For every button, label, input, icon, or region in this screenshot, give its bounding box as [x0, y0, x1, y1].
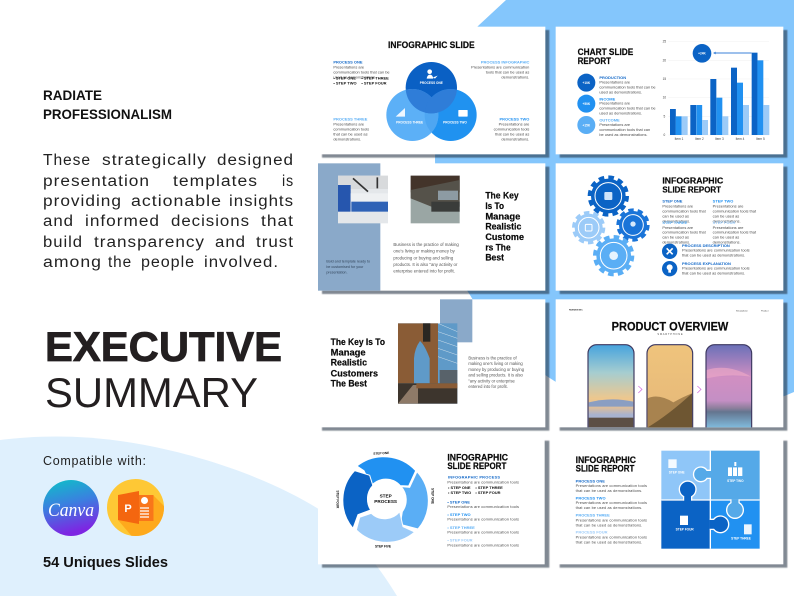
bar chart: Item 3: [715, 137, 724, 141]
text: process infographic: tools that can be used as: [486, 69, 529, 74]
text: step one: Presentations are: [662, 203, 693, 208]
header: Product: [761, 310, 769, 313]
text: process three: PROCESS THREE: [576, 513, 610, 518]
text: process two: that can be used as: [495, 131, 529, 136]
panel: key customers slide: [318, 299, 549, 431]
text: step four: demonstrations.: [713, 239, 741, 244]
text: process three: [576, 513, 647, 527]
venn diagram: [386, 62, 477, 141]
body paragraph: designed: [217, 152, 294, 169]
bar chart: 5: [663, 114, 665, 118]
metric: outcome: +15K: [583, 123, 591, 127]
heading: radiate professionalism: RADIATE: [43, 87, 102, 103]
puzzle: [661, 451, 760, 549]
text: side note: [326, 260, 370, 274]
text: process one: PROCESS ONE: [333, 60, 363, 65]
metric: outcome: [577, 116, 650, 137]
body paragraph: and: [215, 234, 246, 251]
text: side note: be customised for your: [326, 265, 364, 269]
venn diagram: PROCESS TWO: [443, 120, 467, 124]
puzzle: STEP THREE: [731, 536, 751, 540]
blue square: [440, 299, 472, 342]
cycle diagram: STEP FOUR: [336, 490, 340, 509]
text: business paragraph: and selling products. It is also: [468, 373, 524, 378]
metric: production: PRODUCTION: [599, 75, 626, 80]
heading: [331, 337, 385, 389]
puzzle: STEP ONE: [669, 470, 685, 474]
body paragraph: actionable: [131, 193, 222, 210]
heading: radiate professionalism: [43, 87, 172, 122]
heading: Is To: [485, 201, 504, 211]
bar chart: 20: [663, 58, 666, 62]
text: process two: PROCESS TWO: [499, 117, 529, 122]
heading: The Best: [331, 379, 367, 389]
text: business paragraph: [468, 355, 525, 389]
body paragraph: [43, 152, 294, 271]
cycle diagram: [336, 451, 434, 548]
text: side note: Bold and template ready to: [326, 260, 370, 264]
heading: PRODUCT OVERVIEW: [612, 319, 729, 333]
text: process four: that can be used as demonstrations.: [576, 540, 642, 545]
text: process infographic: [471, 60, 529, 79]
heading: CHART SLIDE: [578, 47, 633, 57]
metric: income: communication tools that can be: [599, 106, 656, 111]
text: step list: Presentations are communication tools: [447, 504, 519, 509]
text: process one: Presentations are: [333, 64, 364, 69]
body paragraph: informed: [85, 213, 160, 230]
text: process one: PROCESS ONE: [576, 478, 605, 483]
metric: production: communication tools that can be: [599, 84, 656, 89]
body paragraph: among: [43, 254, 102, 271]
text: step three: communication tools that: [662, 229, 707, 234]
photo: bridge: [398, 323, 457, 404]
text: step list: • STEP ONE: [447, 499, 470, 504]
text: business paragraph: Business is the practice of making: [393, 242, 459, 247]
text: step three: STEP THREE: [662, 220, 688, 225]
heading: INFOGRAPHIC: [447, 453, 508, 463]
text: step four: can be used as: [713, 234, 739, 239]
text: process three: Presentations are: [333, 121, 364, 126]
phone 2: [647, 345, 693, 438]
body paragraph: transparency: [94, 234, 205, 251]
icon: powerpoint: P: [124, 503, 132, 515]
title: executive summary: EXECUTIVE: [45, 323, 282, 370]
callout: +24K: [693, 44, 752, 63]
text: process three: communication tools: [333, 126, 369, 131]
panel: gears slide: [556, 163, 787, 294]
gear: mid blue: [595, 237, 632, 274]
metric: production: [577, 74, 656, 94]
text: step list: • STEP TWO: [447, 512, 471, 517]
heading: Manage: [331, 347, 366, 357]
icon: canva: [43, 480, 99, 536]
heading: [662, 176, 724, 194]
heading: REPORT: [578, 56, 611, 66]
text: process one: • STEP FOUR: [361, 80, 387, 85]
text: process four: PROCESS FOUR: [576, 530, 608, 535]
callout: +24K: +24K: [698, 52, 707, 56]
text: infographic process: • STEP FOUR: [475, 490, 501, 495]
text: infographic process: • STEP ONE: [448, 485, 471, 490]
photo: workspace: [411, 176, 460, 223]
text: process one: • STEP ONE: [333, 75, 356, 80]
gear: blue dark: [590, 178, 627, 214]
text: step one: [662, 199, 707, 223]
metric: outcome: be used as demonstrations.: [599, 132, 648, 137]
header: FAIRDEN INC: [569, 309, 583, 312]
text: step one: can be used as: [662, 213, 689, 218]
photo: office: [338, 176, 388, 223]
text: step three: demonstrations.: [662, 239, 690, 244]
heading: SLIDE REPORT: [576, 464, 635, 474]
heading: Manage: [485, 211, 520, 221]
process explanation: [662, 261, 750, 276]
text: step four: communication tools that: [713, 229, 757, 234]
gear: blue right: [618, 210, 648, 240]
metric: income: used as demonstrations.: [599, 111, 642, 116]
text: process one: Presentations are communication tools: [576, 483, 647, 488]
text: step list: Presentations are communication tools: [447, 530, 519, 535]
heading: The Key Is To: [331, 337, 385, 347]
body paragraph: people: [141, 254, 195, 271]
text: step two: communication tools that: [713, 208, 757, 213]
text: business paragraph: products. It is also "any activity or: [393, 262, 458, 267]
compatible with label: Compatible with:: [43, 454, 146, 468]
text: process one: [576, 478, 647, 493]
text: step list: • STEP THREE: [447, 525, 475, 530]
text: process two: [576, 495, 647, 510]
subheading: SMARTPHONE: [657, 332, 683, 336]
text: business paragraph: money by producing or buying: [468, 367, 525, 372]
text: business paragraph: entered into for profit.: [468, 384, 508, 389]
cycle diagram: PROCESS: [374, 499, 397, 504]
body paragraph: that: [261, 213, 294, 230]
bar chart: Item 2: [695, 137, 704, 141]
body paragraph: These: [43, 152, 91, 169]
metric: outcome: OUTCOME: [599, 117, 620, 122]
heading: The Key: [485, 191, 519, 201]
bar chart: Item 1: [675, 137, 684, 141]
process explanation: PROCESS EXPLANATION: [682, 261, 731, 266]
text: process infographic: PROCESS INFOGRAPHIC: [481, 60, 529, 65]
text: step one: STEP ONE: [662, 199, 683, 204]
text: infographic process: INFOGRAPHIC PROCESS: [448, 475, 500, 480]
body paragraph: providing: [43, 193, 122, 210]
text: step four: Presentations are: [713, 225, 743, 230]
text: step list: • STEP FOUR: [447, 538, 473, 543]
cycle diagram: STEP ONE: [373, 451, 389, 456]
text: process two: Presentations are communication tools: [576, 500, 647, 505]
text: business paragraph: [393, 242, 459, 274]
panel: infographic slide: [318, 27, 549, 158]
text: process three: PROCESS THREE: [333, 117, 368, 122]
text: process three: demonstrations.: [333, 136, 361, 141]
text: process one: communication tools that can be: [333, 69, 390, 74]
panel: puzzle slide: [556, 437, 787, 568]
text: process two: communication tools: [494, 126, 529, 131]
body paragraph: trust: [256, 234, 294, 251]
panel: product overview slide: [556, 299, 787, 438]
bar chart: 15: [663, 77, 666, 81]
body paragraph: strategically: [102, 152, 207, 169]
panel: chart slide: [556, 27, 787, 158]
arrows: [638, 386, 701, 393]
text: process one: [333, 60, 390, 85]
icon: canva: Canva: [48, 500, 94, 521]
bar chart: 10: [663, 96, 666, 100]
background shape: pale blue curve: [0, 436, 397, 596]
caption: 54 uniques slides: 54 Uniques Slides: [43, 554, 168, 571]
text: process four: Presentations are communication tools: [576, 534, 647, 539]
text: process three: Presentations are communication tools: [576, 517, 647, 522]
text: process three: [333, 117, 369, 141]
text: process infographic: Presentations are communication: [471, 64, 529, 69]
text: step two: [713, 199, 757, 223]
body paragraph: decisions: [171, 213, 250, 230]
title: executive summary: [45, 323, 282, 416]
text: process infographic: demonstrations.: [501, 74, 529, 79]
gear: pale: [574, 213, 603, 242]
phones: [588, 345, 752, 438]
process description: PROCESS DESCRIPTION: [682, 243, 730, 248]
puzzle: STEP FOUR: [676, 528, 694, 532]
metric: production: used as demonstrations.: [599, 89, 642, 94]
metric: income: INCOME: [599, 96, 616, 101]
metric: outcome: Presentations are: [599, 122, 630, 127]
text: process one: used as demonstrations.: [333, 74, 376, 79]
text: business paragraph: making one's living or making: [468, 361, 523, 366]
venn diagram: PROCESS THREE: [396, 120, 423, 124]
text: step three: can be used as: [662, 234, 689, 239]
heading: Best: [485, 253, 504, 263]
title: executive summary: SUMMARY: [45, 369, 258, 416]
process description: [662, 243, 750, 259]
bar chart: 25: [663, 40, 666, 44]
text: step two: demonstrations.: [713, 218, 741, 223]
text: step two: STEP TWO: [713, 199, 733, 204]
text: process one: • STEP TWO: [333, 80, 357, 85]
text: step one: communication tools that: [662, 208, 707, 213]
text: step three: [662, 220, 707, 244]
body paragraph: and: [43, 213, 74, 230]
text: business paragraph: one's living or making money by: [393, 249, 456, 254]
text: step one: demonstrations.: [662, 218, 690, 223]
text: step two: Presentations are: [713, 203, 743, 208]
text: process four: [576, 530, 647, 545]
text: business paragraph: Business is the practice of: [468, 355, 517, 360]
heading: [578, 47, 633, 66]
text: step list: Presentations are communication tools: [447, 517, 519, 522]
bar chart: [663, 40, 769, 141]
text: step list: [447, 499, 519, 547]
venn diagram: PROCESS ONE: [420, 81, 443, 85]
process explanation: that can be used as demonstrations.: [682, 271, 745, 276]
body paragraph: presentation: [43, 173, 150, 190]
text: infographic process: [447, 475, 519, 495]
text: step four: STEP FOUR: [713, 220, 736, 225]
heading: INFOGRAPHIC SLIDE: [388, 40, 475, 50]
metric: production: +10K: [583, 81, 591, 85]
process explanation: Presentations are communication tools: [682, 266, 750, 271]
text: infographic process: • STEP THREE: [475, 485, 503, 490]
metric: outcome: communication tools that can: [599, 127, 650, 132]
bar chart: Item 5: [756, 137, 765, 141]
heading: [447, 453, 508, 471]
icon: powerpoint: [107, 479, 164, 536]
heading: SLIDE REPORT: [662, 185, 721, 194]
body paragraph: involved.: [204, 254, 279, 271]
phone 1: [588, 345, 634, 438]
text: business paragraph: "any activity or enterprise: [468, 378, 516, 383]
cycle diagram: STEP FIVE: [375, 544, 391, 548]
body paragraph: build: [43, 234, 83, 251]
heading: Customers: [331, 368, 378, 378]
bar chart: Item 4: [736, 137, 745, 141]
text: business paragraph: enterprise entered into for profit.: [393, 269, 455, 274]
heading: [576, 455, 636, 474]
text: process one: • STEP THREE: [361, 75, 389, 80]
text: business paragraph: producing or buying and selling: [393, 255, 454, 260]
process description: Presentations are communication tools: [682, 248, 750, 253]
header: [569, 309, 769, 313]
text: step two: can be used as: [713, 213, 739, 218]
text: process two: Presentations are: [499, 121, 529, 126]
text: infographic process: Presentations are communication tools: [447, 479, 519, 484]
heading: [485, 191, 524, 263]
cycle diagram: STEP: [380, 494, 392, 499]
body paragraph: the: [108, 254, 132, 271]
text: step four: [713, 220, 757, 244]
text: process three: that can be used as: [333, 131, 368, 136]
metric: income: [577, 95, 656, 116]
text: side note: presentation.: [326, 270, 347, 274]
text: process three: that can be used as demonstrations.: [576, 522, 642, 527]
text: process two: PROCESS TWO: [576, 495, 606, 500]
metric: income: +50K: [583, 102, 591, 106]
text: process two: demonstrations.: [501, 136, 529, 141]
heading: INFOGRAPHIC: [576, 455, 636, 465]
header: Smartphone: [736, 310, 749, 313]
heading: Realistic: [485, 222, 521, 232]
heading: SLIDE REPORT: [447, 461, 507, 471]
process description: that can be used as demonstrations.: [682, 253, 745, 258]
body paragraph: insights: [229, 193, 294, 210]
panel: step process slide: [318, 437, 549, 568]
phone 3: [706, 345, 752, 438]
bar chart: 0: [663, 133, 665, 137]
text: process two: that can be used as demonstrations.: [576, 505, 642, 510]
panel: business photo slide: [318, 163, 549, 294]
heading: INFOGRAPHIC: [662, 176, 724, 185]
text: infographic process: • STEP TWO: [448, 490, 471, 495]
heading: Custome: [485, 232, 524, 242]
body paragraph: is: [282, 173, 294, 190]
body paragraph: templates: [173, 173, 258, 190]
metric: income: Presentations are: [599, 101, 630, 106]
text: process one: that can be used as demonstrations.: [576, 488, 642, 493]
puzzle: STEP TWO: [727, 479, 744, 483]
metric: production: Presentations are: [599, 79, 630, 84]
background shape: blue blob: [435, 0, 794, 416]
heading: radiate professionalism: PROFESSIONALISM: [43, 106, 172, 122]
blue side panel: [318, 163, 380, 291]
text: step three: Presentations are: [662, 225, 693, 230]
heading: rs The: [485, 242, 511, 252]
heading: Realistic: [331, 358, 367, 368]
text: step list: Presentations are communication tools: [447, 542, 519, 547]
cycle diagram: STEP ONE: [430, 488, 434, 504]
text: process two: [494, 117, 529, 141]
